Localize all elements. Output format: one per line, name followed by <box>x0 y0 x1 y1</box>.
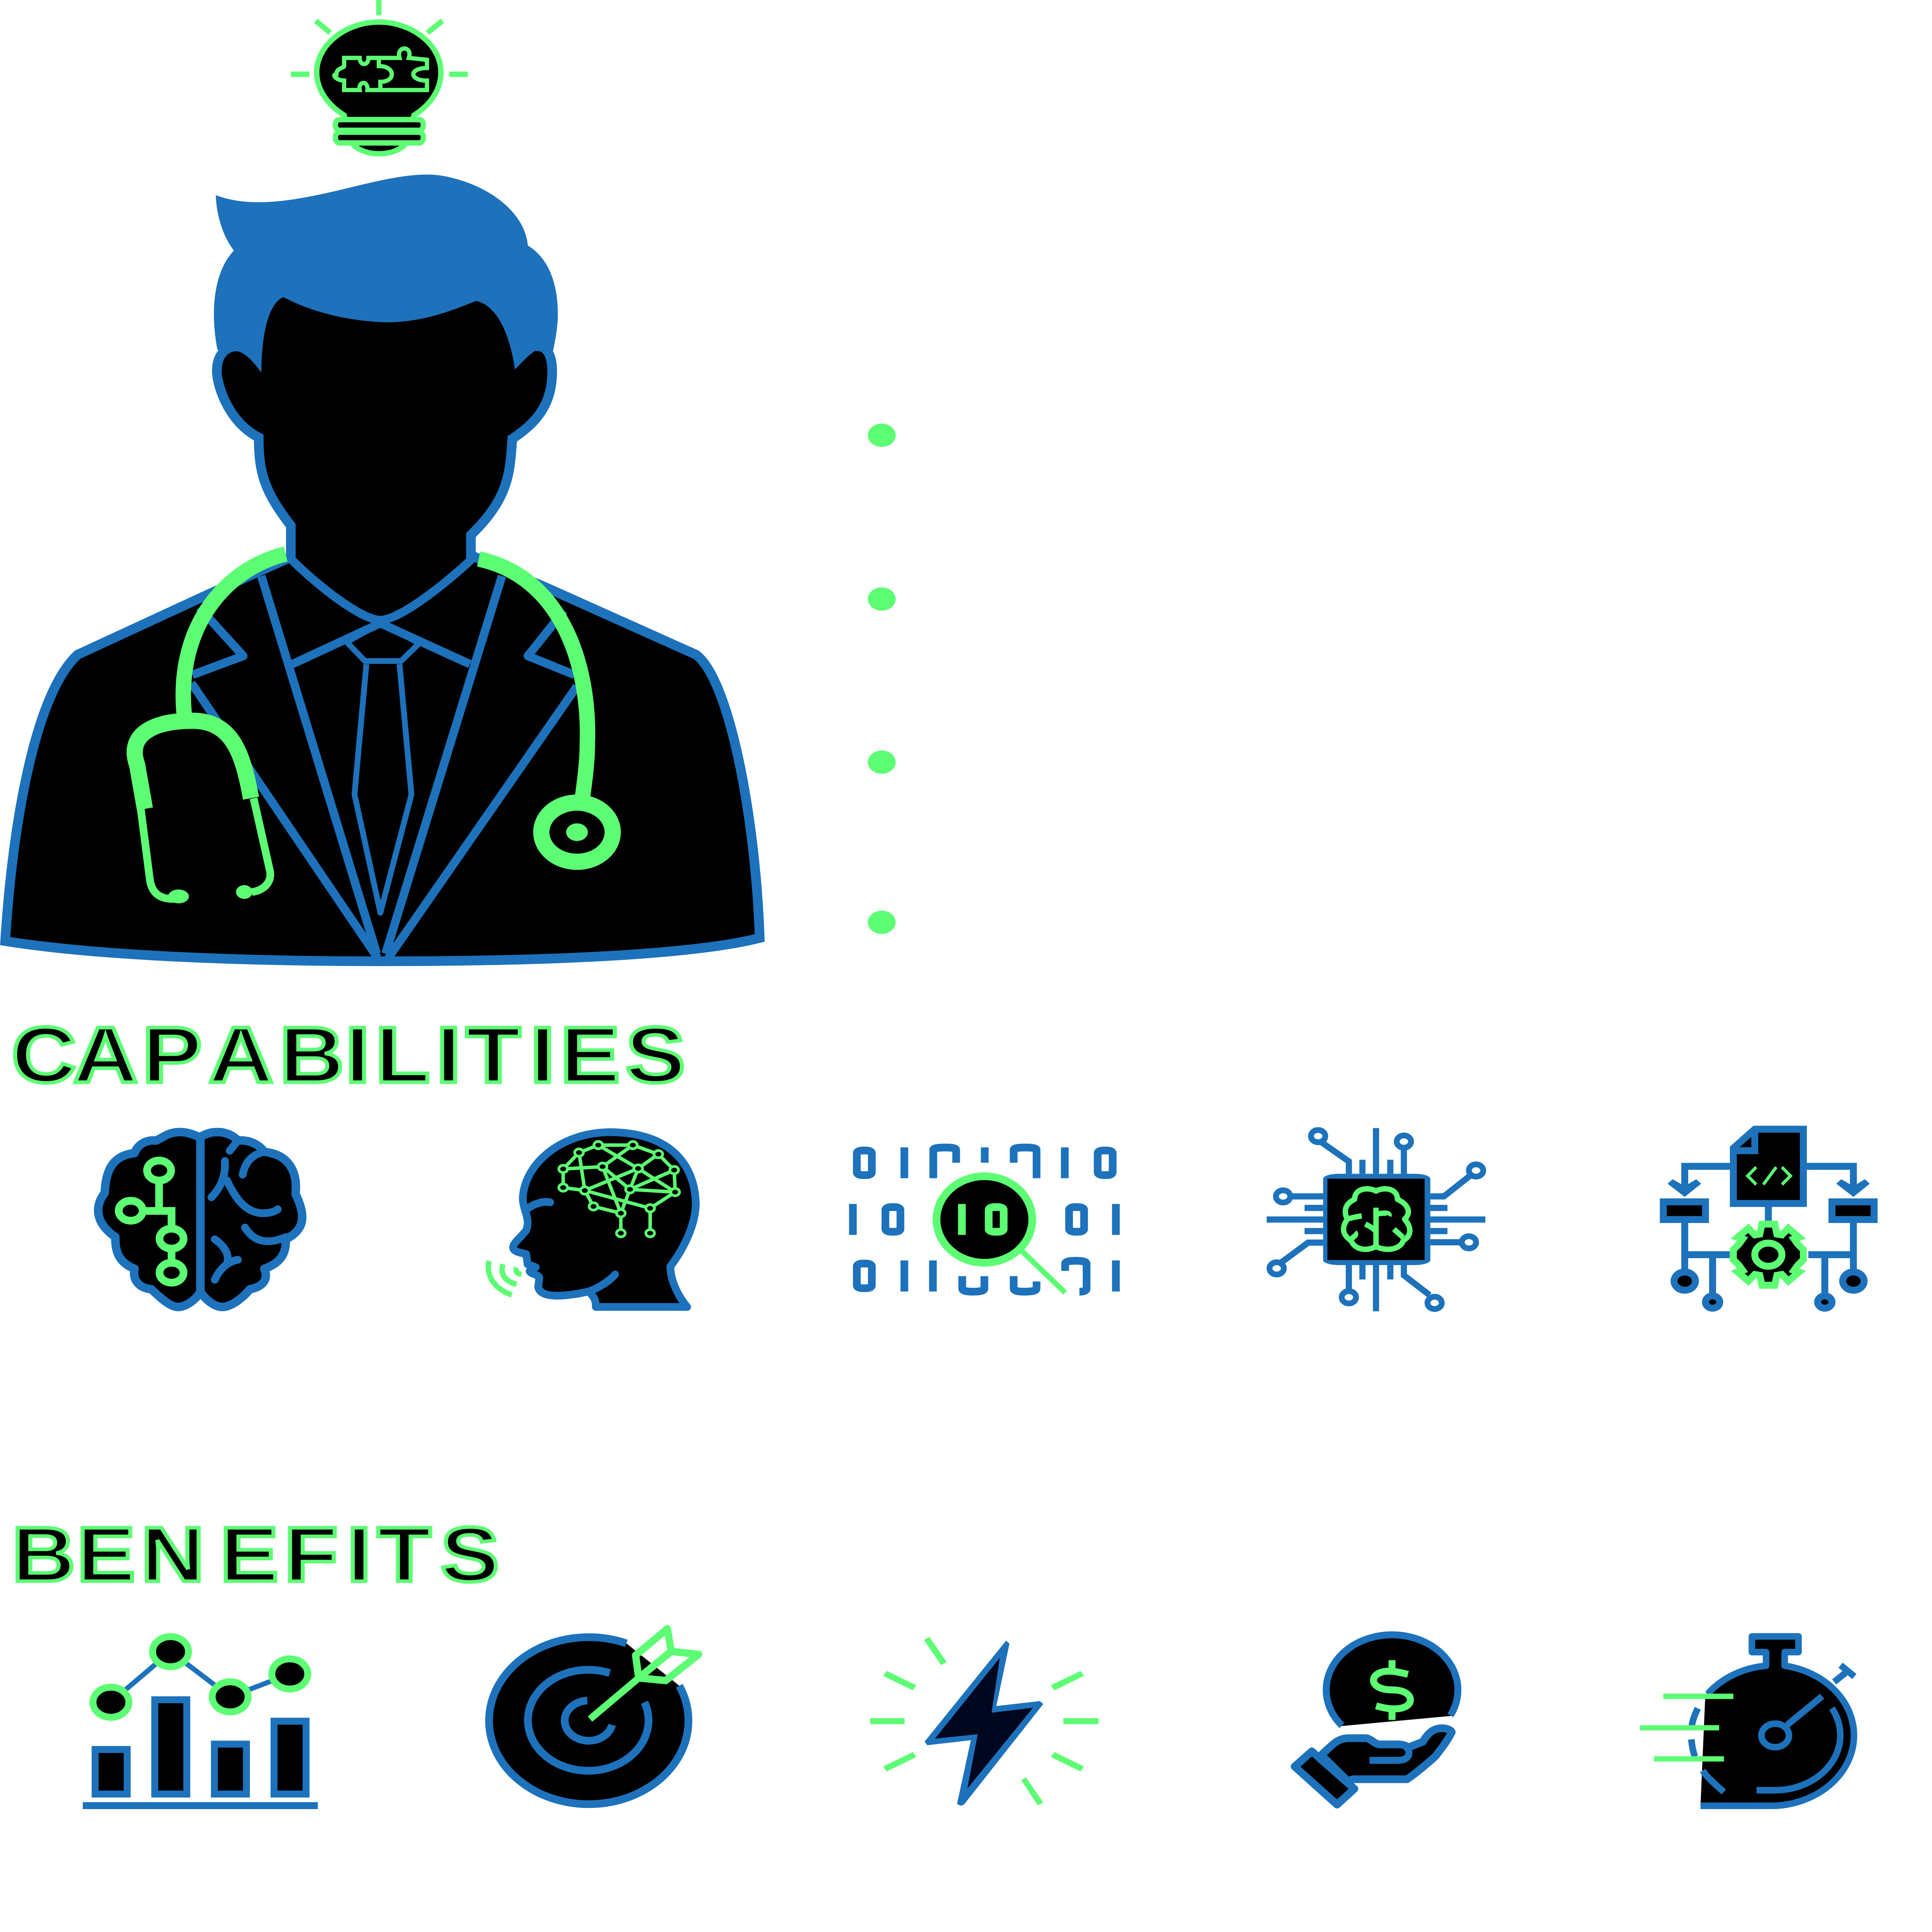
chart nodes <box>93 1636 308 1717</box>
green circuit <box>119 1160 184 1283</box>
icon: lightning bolt <box>870 1637 1099 1806</box>
stethoscope <box>135 554 613 903</box>
brain in chip <box>1344 1189 1410 1249</box>
icon: stopwatch with speed lines <box>1640 1636 1854 1806</box>
necktie <box>347 623 419 913</box>
icon: binary code with magnifier <box>853 1147 1116 1293</box>
doctor figure <box>5 175 760 961</box>
neural network <box>559 1141 679 1237</box>
sound waves <box>488 1261 521 1295</box>
hair <box>214 175 558 372</box>
icon: brain with circuit <box>98 1132 302 1307</box>
heading: capabilities: CAPABILITIES <box>11 1010 685 1099</box>
icon: growth bar chart <box>83 1636 318 1806</box>
lightning rays <box>870 1637 1099 1805</box>
magnifier <box>937 1176 1065 1293</box>
doctor silhouette <box>5 283 760 961</box>
icon: microchip with brain <box>1267 1128 1485 1311</box>
icon: lightbulb with puzzle piece <box>291 0 468 154</box>
arrow <box>590 1629 699 1719</box>
heading: benefits: BENEFITS <box>12 1511 499 1598</box>
gear <box>1733 1224 1803 1285</box>
icon: target with arrow <box>489 1629 699 1804</box>
file <box>1733 1129 1803 1204</box>
icon: speaking head with neural network <box>488 1132 696 1307</box>
suit lapels and collar <box>192 559 577 958</box>
icon: hand holding dollar coin <box>1295 1635 1458 1804</box>
cuff <box>1295 1751 1354 1804</box>
bullet points <box>868 423 896 934</box>
icon: code file automation flow <box>1663 1129 1874 1308</box>
dollar sign <box>1374 1660 1410 1720</box>
hand <box>1321 1728 1452 1781</box>
speed lines <box>1640 1694 1733 1762</box>
